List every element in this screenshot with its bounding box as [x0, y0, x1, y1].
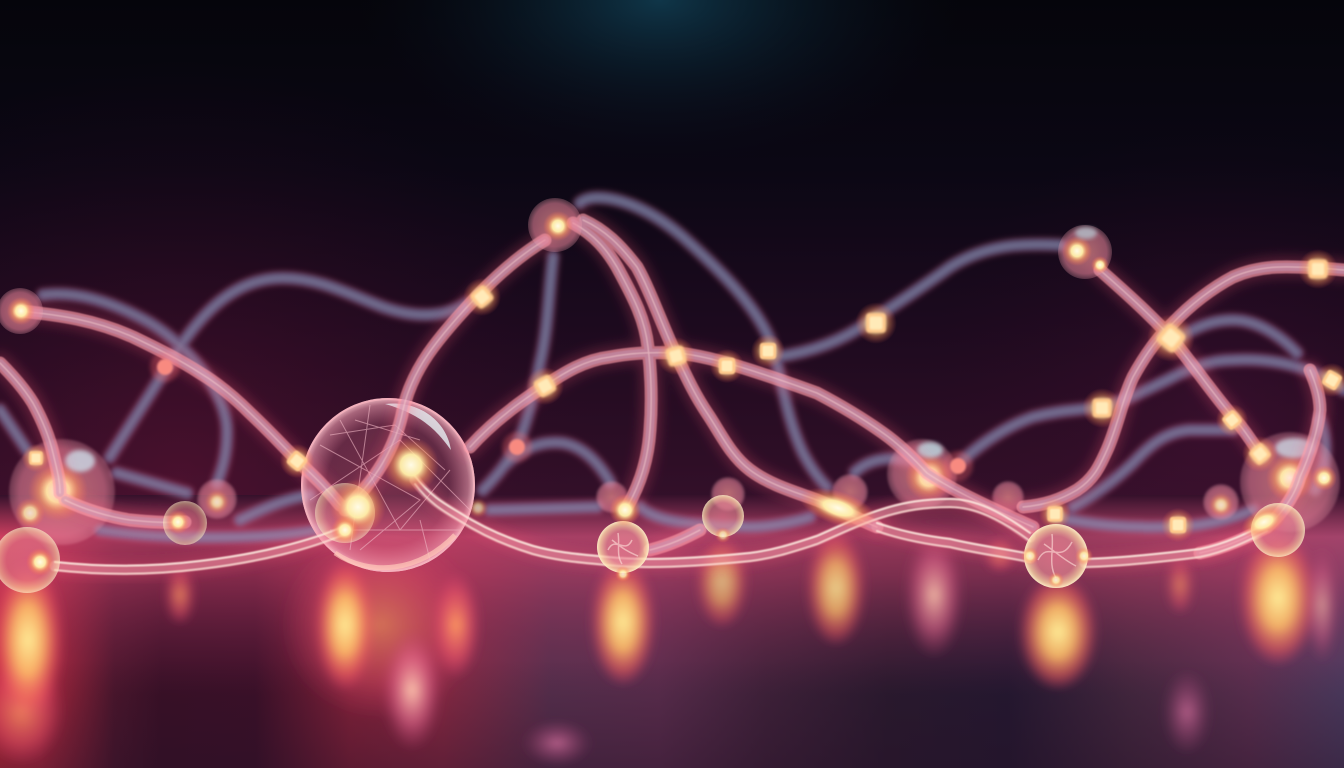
main large glass sphere — [301, 398, 475, 572]
back fibres — [0, 198, 1344, 538]
bright light sparks — [26, 437, 1292, 588]
reflective floor — [0, 495, 1344, 768]
low bright floor fibres — [55, 476, 1267, 574]
glass sphere, centre right — [887, 439, 957, 509]
front glass spheres — [0, 483, 1305, 593]
front fibres — [0, 220, 1344, 553]
glowing square beads — [22, 249, 1344, 542]
floor light reflections — [0, 528, 1338, 767]
large glass sphere, far left — [9, 439, 115, 545]
distant small glass beads — [197, 474, 1239, 520]
top glass nodes — [0, 198, 1112, 334]
large glass sphere, right — [1240, 432, 1340, 532]
